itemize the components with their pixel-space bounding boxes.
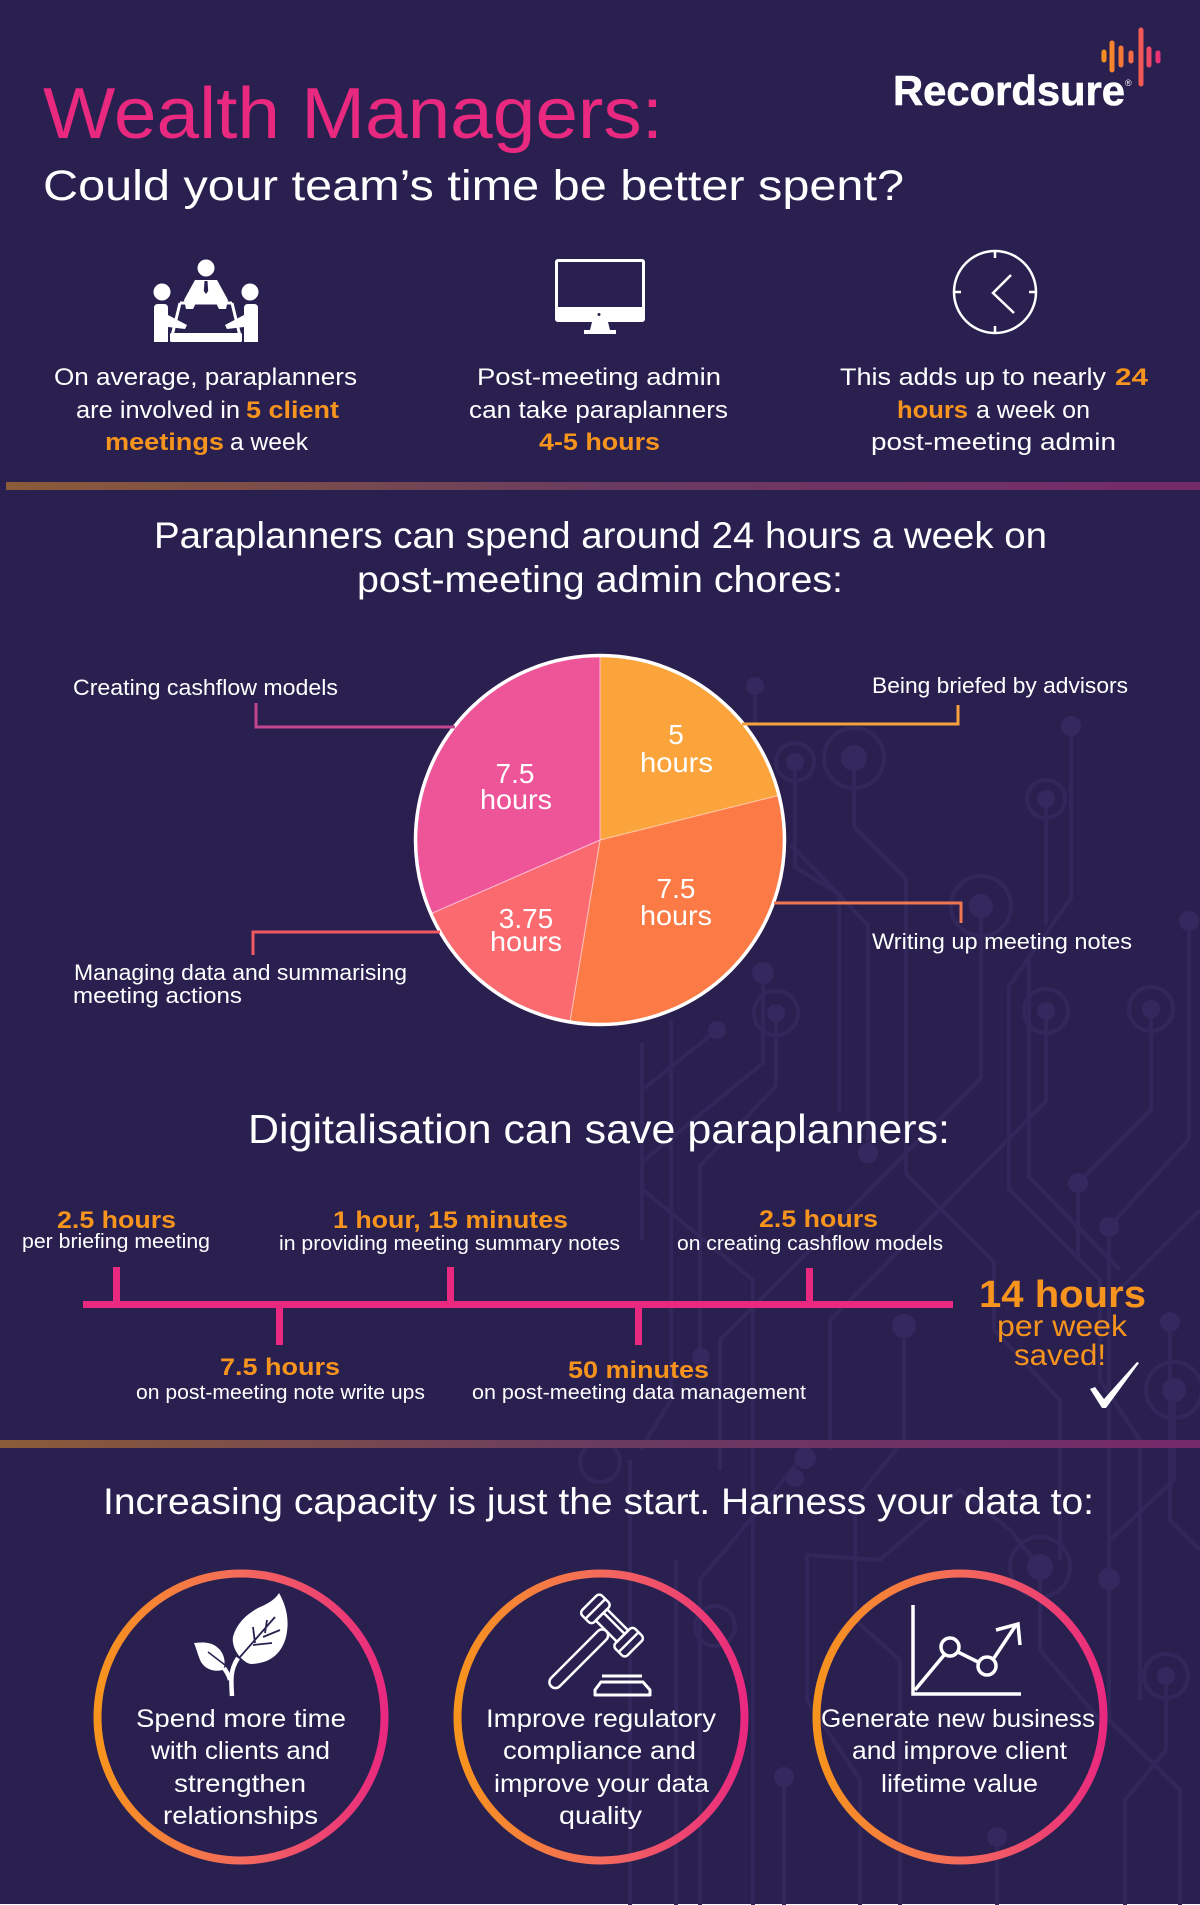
panel: new business: and improve client <box>852 1737 1067 1765</box>
panel: regulatory compliance: Improve regulatory <box>486 1705 717 1733</box>
value: 7.5 hours notes: 7.5 <box>657 873 695 904</box>
heading: harness your data: Increasing capacity is just the start. Harness your data to: <box>103 1481 1094 1522</box>
saving: summary notes: in providing meeting summary notes <box>279 1233 620 1255</box>
panel: client relationships: with clients and <box>150 1737 330 1765</box>
text block: client meetings <box>54 364 357 456</box>
total: 14 hours saved: saved! <box>1014 1339 1106 1372</box>
saving: cashflow <box>677 1206 943 1255</box>
callout: creating cashflow models <box>73 675 455 727</box>
text block: weekly total: a week on <box>976 397 1090 424</box>
logo: Recordsure: Recordsure <box>893 67 1125 114</box>
heading: 24 hours chores: Paraplanners can spend around 24 hours a week on <box>154 515 1047 556</box>
value: 5 hours: hours <box>640 747 713 778</box>
callout: writing up meeting notes <box>774 903 1132 954</box>
text block: weekly total: 24 <box>1115 364 1149 391</box>
panel: client relationships: Spend more time <box>136 1705 346 1733</box>
total: 14 hours saved: 14 hours <box>979 1274 1146 1316</box>
slice: cashflow models <box>416 656 600 914</box>
value: 7.5 hours notes <box>640 873 712 931</box>
saving: data management: on post-meeting data management <box>472 1382 806 1404</box>
saving: briefing <box>22 1207 210 1253</box>
panel: regulatory compliance <box>458 1574 744 1860</box>
saving: data management: 50 minutes <box>568 1357 709 1384</box>
text block: admin time: 4-5 hours <box>539 429 660 456</box>
icon: gavel <box>529 1593 650 1709</box>
text block: weekly total <box>840 364 1149 456</box>
panel: regulatory compliance: quality <box>559 1802 643 1830</box>
value: 7.5 hours cashflow <box>480 758 552 815</box>
callout: managing data <box>73 932 440 1008</box>
panel: new business: lifetime value <box>881 1770 1038 1798</box>
value: 3.75 hours: 3.75 <box>499 903 553 934</box>
total: 14 hours saved: per week <box>997 1310 1128 1343</box>
saving: note write ups: on post-meeting note write ups <box>136 1382 425 1404</box>
panel: client relationships <box>98 1574 384 1860</box>
logo: Recordsure: ® <box>1125 78 1132 88</box>
logo: Recordsure <box>893 30 1158 114</box>
slice: writing notes <box>570 796 784 1024</box>
saving: summary notes: 1 hour, 15 minutes <box>333 1207 568 1234</box>
callout: managing data: meeting actions <box>73 983 242 1008</box>
value: 3.75 hours: hours <box>490 926 562 957</box>
timeline <box>83 1267 953 1345</box>
callout: writing up meeting notes: Writing up meeting notes <box>872 929 1132 954</box>
text block: client meetings: 5 client <box>246 397 339 424</box>
value: 7.5 hours notes: hours <box>640 900 712 931</box>
text block: client meetings: are involved in <box>76 397 240 424</box>
text block: admin time: Post-meeting admin <box>477 364 721 391</box>
saving: briefing: 2.5 hours <box>57 1207 176 1234</box>
total: 14 hours saved <box>979 1274 1146 1372</box>
subtitle: Could your team’s time be better spent? <box>43 162 904 210</box>
slice: managing data <box>431 840 600 1022</box>
icon: growth chart <box>913 1605 1021 1694</box>
pie chart <box>416 656 784 1024</box>
value: 5 hours: 5 <box>668 719 684 750</box>
callout: creating cashflow models: Creating cashflow models <box>73 675 338 700</box>
saving: note write ups <box>136 1354 425 1404</box>
icon: check mark <box>1090 1362 1139 1408</box>
panel: new business <box>816 1574 1104 1860</box>
icon: meeting <box>154 260 258 342</box>
heading: digitalisation: Digitalisation can save paraplanners: <box>248 1106 950 1152</box>
text block: admin time <box>469 364 728 456</box>
panel: regulatory compliance: improve your data <box>494 1770 709 1798</box>
icon: clock <box>954 251 1036 333</box>
panel: client relationships: strengthen <box>174 1770 306 1798</box>
saving: cashflow: on creating cashflow models <box>677 1233 943 1255</box>
value: 3.75 hours <box>490 903 562 957</box>
text block: weekly total: This adds up to nearly <box>840 364 1106 391</box>
text block: weekly total: hours <box>897 397 968 424</box>
saving: note write ups: 7.5 hours <box>220 1354 340 1381</box>
value: 7.5 hours cashflow: 7.5 <box>496 758 534 789</box>
panel: client relationships: relationships <box>163 1802 318 1830</box>
slice: being briefed <box>600 656 778 840</box>
callout: managing data: Managing data and summarising <box>74 960 407 985</box>
icon: desktop monitor <box>555 259 645 334</box>
text block: client meetings: a week <box>230 429 309 456</box>
saving: data management <box>472 1357 806 1404</box>
heading: 24 hours chores: post-meeting admin chores: <box>357 559 843 600</box>
icon: leaf <box>194 1593 288 1696</box>
text block: client meetings: meetings <box>105 429 224 456</box>
title: Wealth Managers: <box>43 74 663 154</box>
text block: admin time: can take paraplanners <box>469 397 728 424</box>
callout: being briefed by advisors <box>742 673 1128 724</box>
value: 5 hours <box>640 719 713 778</box>
heading: 24 hours chores <box>154 515 1047 600</box>
panel: regulatory compliance: compliance and <box>503 1737 696 1765</box>
saving: summary notes <box>279 1207 620 1255</box>
text block: weekly total: post-meeting admin <box>871 429 1116 456</box>
value: 7.5 hours cashflow: hours <box>480 784 552 815</box>
panel: new business: Generate new business <box>821 1705 1095 1733</box>
text block: client meetings: On average, paraplanners <box>54 364 357 391</box>
saving: cashflow: 2.5 hours <box>759 1206 878 1233</box>
callout: being briefed by advisors: Being briefed by advisors <box>872 673 1128 698</box>
saving: briefing: per briefing meeting <box>22 1231 210 1253</box>
